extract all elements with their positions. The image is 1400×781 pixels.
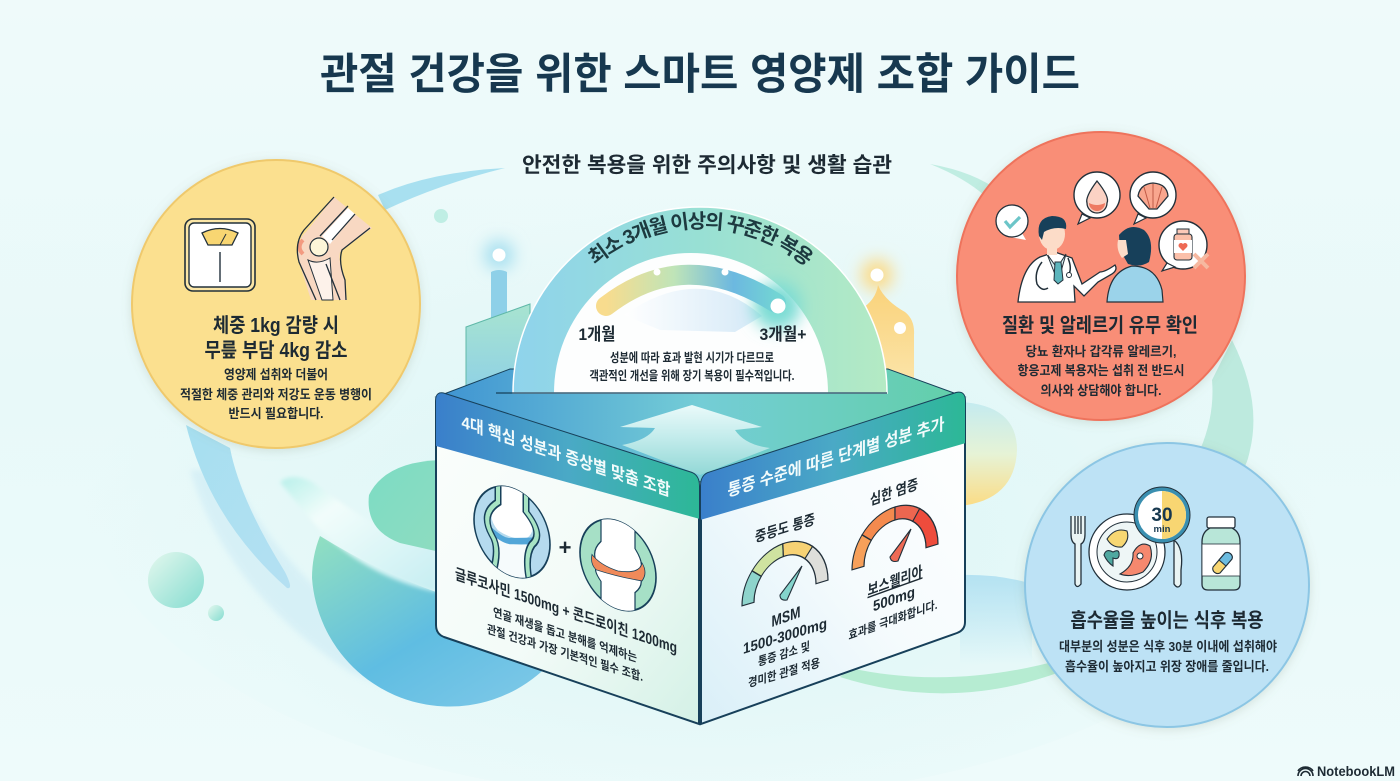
box: top face bbox=[436, 369, 965, 482]
header band bbox=[700, 390, 966, 520]
icon: knife bbox=[1174, 540, 1182, 587]
icon: 30 minute timer: 30 bbox=[1151, 505, 1173, 526]
header text: 4대 핵심 성분과 증상별 맞춤 조합 bbox=[462, 412, 670, 500]
panel: arch duration: 최소 3개월 이상의 꾸준한 복용 bbox=[588, 211, 812, 264]
watermark: NotebookLM: NotebookLM bbox=[1317, 764, 1395, 779]
icon: pill bottle bbox=[1202, 517, 1240, 590]
text: boswellia dose: 500mg bbox=[873, 584, 915, 615]
panel: weight management bbox=[132, 160, 420, 448]
text: duration detail: 성분에 따라 효과 발현 시기가 다르므로 bbox=[610, 350, 774, 365]
text: MSM detail bbox=[748, 639, 820, 690]
text: weight detail: 반드시 필요합니다. bbox=[228, 406, 324, 421]
subtitle: 안전한 복용을 위한 주의사항 및 생활 습관 bbox=[522, 154, 892, 177]
text: consult detail: 의사와 상담해야 합니다. bbox=[1040, 383, 1162, 398]
text: MSM dose: MSM bbox=[772, 603, 800, 631]
panel: stepwise ingredients (right face) bbox=[700, 390, 966, 724]
icon: plate of food bbox=[1089, 514, 1165, 590]
decorative background swooshes bbox=[148, 164, 1253, 707]
icon: glucosamine joint bbox=[473, 485, 551, 579]
label: moderate pain: 중등도 통증 bbox=[755, 511, 815, 546]
text: intake detail: 대부분의 성분은 식후 30분 이내에 섭취해야 bbox=[1059, 639, 1277, 654]
icon: 30 minute timer: min bbox=[1154, 524, 1171, 535]
heading: weight: 무릎 부담 4kg 감소 bbox=[204, 339, 348, 362]
icon: upward arrow bbox=[620, 405, 770, 475]
header text: 통증 수준에 따른 단계별 성분 추가 bbox=[727, 414, 945, 501]
label: 1 month: 1개월 bbox=[578, 325, 616, 344]
progress arc bbox=[606, 268, 801, 330]
title: 관절 건강을 위한 스마트 영양제 조합 가이드 bbox=[320, 51, 1080, 99]
icon: chondroitin joint bbox=[579, 518, 657, 612]
panel: core ingredients (left face) bbox=[436, 390, 700, 724]
icon: supplement bubble bbox=[1159, 221, 1208, 271]
icon: check bubble bbox=[996, 205, 1028, 240]
decoration: left tower bbox=[466, 240, 530, 395]
header band bbox=[436, 390, 700, 519]
heading: consult: 질환 및 알레르기 유무 확인 bbox=[1002, 314, 1198, 337]
gauge: moderate bbox=[742, 530, 828, 606]
text: boswellia detail: 효과를 극대화합니다. bbox=[848, 597, 938, 642]
icon: knee joint bbox=[297, 197, 372, 300]
text: ingredient detail: 연골 재생을 돕고 분해를 억제하는 bbox=[493, 604, 637, 665]
text: weight detail bbox=[180, 367, 372, 421]
icon: bathroom scale bbox=[185, 219, 255, 291]
icon: patient bbox=[1107, 227, 1163, 302]
text: boswellia dose bbox=[868, 563, 922, 615]
text: weight detail: 적절한 체중 관리와 저강도 운동 병행이 bbox=[180, 387, 372, 402]
text: consult detail: 항응고제 복용자는 섭취 전 반드시 bbox=[1018, 363, 1184, 378]
text: MSM dose: 1500-3000mg bbox=[743, 615, 827, 658]
gauge needle: severe bbox=[890, 529, 911, 562]
label: severe inflammation: 심한 염증 bbox=[870, 476, 918, 509]
icon: fork bbox=[1071, 516, 1085, 586]
text: consult detail: 당뇨 환자나 갑각류 알레르기, bbox=[1026, 344, 1176, 359]
label: 3 months: 3개월+ bbox=[760, 325, 807, 344]
text: duration detail bbox=[590, 350, 794, 383]
icon: 30 minute timer bbox=[1134, 487, 1190, 543]
icon: doctor bbox=[1018, 216, 1116, 302]
text: boswellia dose: 보스웰리아 bbox=[868, 563, 922, 600]
decoration: right tower bbox=[860, 259, 914, 382]
text: consult detail bbox=[1018, 344, 1184, 398]
text: ingredient detail: 관절 건강과 가장 기본적인 필수 조합. bbox=[487, 621, 643, 684]
text: intake detail bbox=[1059, 639, 1277, 674]
text: MSM detail: 통증 감소 및 bbox=[758, 639, 810, 669]
heading: weight: 체중 1kg 감량 시 bbox=[213, 314, 339, 337]
panel: after-meal intake bbox=[1025, 443, 1309, 727]
icon: blood drop bubble bbox=[1074, 172, 1120, 224]
icon: shell bubble bbox=[1130, 172, 1176, 224]
text: weight detail: 영양제 섭취와 더불어 bbox=[224, 367, 328, 382]
text: dosage: 글루코사민 1500mg + 콘드로이친 1200mg bbox=[455, 565, 677, 657]
text: intake detail: 흡수율이 높아지고 위장 장애를 줄입니다. bbox=[1065, 659, 1269, 674]
heading: weight bbox=[204, 314, 348, 362]
heading: intake: 흡수율을 높이는 식후 복용 bbox=[1070, 609, 1264, 632]
plus sign: + bbox=[559, 535, 571, 560]
text: MSM detail: 경미한 관절 적용 bbox=[748, 655, 820, 690]
panel: arch duration bbox=[496, 206, 888, 394]
arc heading bbox=[535, 228, 865, 393]
gauge needle: moderate bbox=[780, 566, 802, 600]
panel: consult doctor bbox=[957, 132, 1245, 420]
text: duration detail: 객관적인 개선을 위해 장기 복용이 필수적입니다. bbox=[590, 368, 794, 383]
gauge: severe bbox=[852, 494, 938, 570]
